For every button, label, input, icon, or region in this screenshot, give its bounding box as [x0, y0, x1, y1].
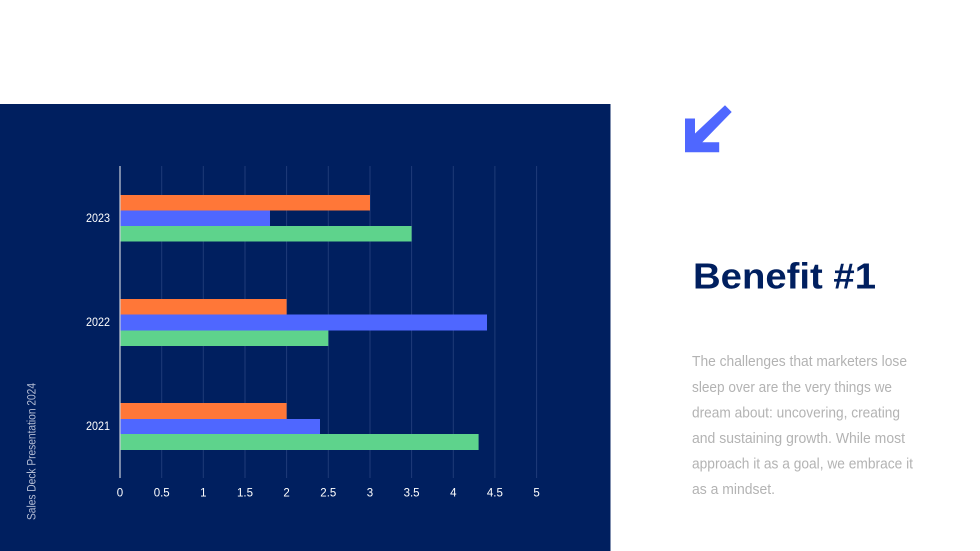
value axis labels: 1 — [200, 488, 207, 500]
panel: navy chart background — [0, 104, 610, 551]
body text: and sustaining growth. While most — [692, 430, 906, 447]
category labels: 2023 — [86, 211, 110, 225]
body text: The challenges that marketers lose — [692, 353, 907, 370]
category labels: 2022 — [86, 315, 110, 329]
body text: sleep over are the very things we — [692, 379, 892, 396]
value axis labels: 0 — [117, 488, 123, 500]
bars: 2021 — [120, 403, 479, 450]
value axis labels: 4.5 — [487, 488, 503, 500]
icon: arrow pointing down-left — [685, 105, 732, 152]
footer label: vertical presentation text: Sales Deck Presentation 2024 — [26, 382, 38, 520]
category labels — [86, 211, 110, 433]
value axis labels: 5 — [533, 488, 540, 500]
category labels: 2021 — [86, 419, 110, 433]
heading: Benefit #1 — [693, 256, 876, 296]
bar chart — [86, 166, 540, 500]
vertical axis — [119, 166, 121, 478]
value axis labels: 3.5 — [404, 488, 420, 500]
body text: approach it as a goal, we embrace it — [692, 456, 914, 472]
bars: 2022 — [120, 299, 487, 346]
value axis labels: 3 — [367, 488, 373, 500]
body text: as a mindset. — [692, 481, 775, 498]
value axis labels: 0.5 — [154, 488, 170, 500]
value axis labels: 1.5 — [237, 488, 253, 500]
value axis labels: 4 — [450, 488, 457, 500]
body text: dream about: uncovering, creating — [692, 404, 900, 422]
value axis labels — [117, 488, 540, 500]
value axis labels: 2.5 — [320, 488, 336, 500]
body text — [692, 353, 914, 498]
value axis labels: 2 — [283, 488, 290, 500]
bars: 2023 — [120, 195, 412, 242]
